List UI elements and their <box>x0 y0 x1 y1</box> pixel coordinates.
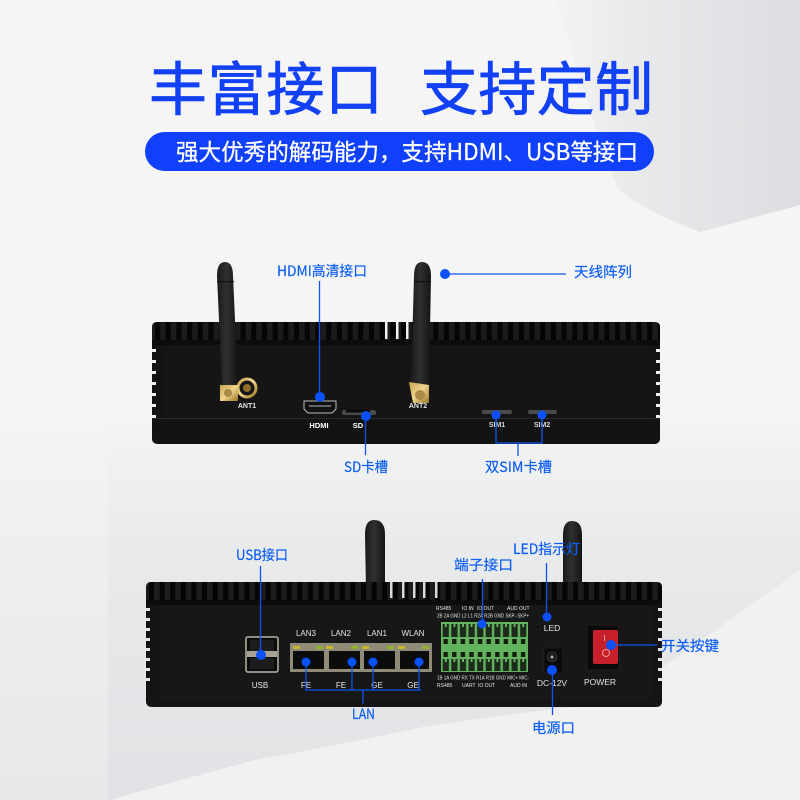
chassis bottom <box>146 582 662 707</box>
callout: SD <box>344 411 388 477</box>
terminal block: IO OUT <box>477 606 494 612</box>
port: USB: USB <box>252 681 268 690</box>
callout: USB: USB接口 <box>236 545 288 565</box>
port block: LAN: GE <box>407 681 419 690</box>
power switch <box>584 625 619 687</box>
port block: LAN <box>290 629 432 690</box>
port: SIM1: SIM1 <box>489 422 505 429</box>
terminal block: AUD IN <box>510 683 527 689</box>
port block: LAN: LAN3 <box>296 629 317 638</box>
port: USB <box>246 637 278 690</box>
callout: HDMI <box>277 261 367 402</box>
terminal block: RS485 <box>437 683 453 689</box>
antenna 2 <box>411 262 431 386</box>
port: SIM1 <box>482 410 512 429</box>
callout: switch: 开关按键 <box>661 636 719 656</box>
callout: SD: SD卡槽 <box>344 457 388 477</box>
device: top panel <box>152 262 660 444</box>
callout: terminal <box>454 555 513 628</box>
port block: LAN: LAN2 <box>331 629 352 638</box>
power switch: POWER <box>584 677 616 687</box>
indicator: LED: LED <box>544 623 560 633</box>
callout: antenna array: 天线阵列 <box>574 262 632 282</box>
title: 支持定制 <box>420 43 653 127</box>
port block: LAN: FE <box>336 681 346 690</box>
terminal block <box>436 606 530 689</box>
callout: power port: 电源口 <box>532 718 575 738</box>
callout: LED: LED指示灯 <box>513 539 580 559</box>
port: DC jack: DC-12V <box>537 678 567 688</box>
terminal block: IO IN <box>462 606 474 612</box>
title: 丰富接口 <box>149 43 383 127</box>
terminal block: 2B 2A GND L2 L1 R2A R2B GND SKP- SKP+ <box>437 614 529 620</box>
terminal block: UART <box>462 683 476 689</box>
port block: LAN: LAN1 <box>367 629 388 638</box>
connector: ANT2: ANT2 <box>409 403 427 410</box>
port: DC jack <box>537 648 567 688</box>
antenna 1 <box>217 262 238 386</box>
connector: ANT2 <box>409 382 429 410</box>
callout: antenna array <box>440 262 632 282</box>
port: HDMI: HDMI <box>309 421 329 430</box>
port: SIM2: SIM2 <box>534 422 550 429</box>
subtitle pill: 强大优秀的解码能力，支持HDMI、USB等接口 <box>176 133 638 167</box>
chassis top <box>152 322 660 444</box>
port: SIM2 <box>528 410 557 429</box>
port block: LAN: WLAN <box>401 629 425 638</box>
callout: power port <box>532 665 575 738</box>
connector: ANT1: ANT1 <box>238 403 256 410</box>
device: bottom panel <box>146 520 662 707</box>
callout: dual SIM <box>485 410 552 477</box>
terminal block: 1B 1A GND RX TX R1A R1B GND MIC+ MIC- <box>437 676 529 682</box>
port block: LAN: FE <box>301 681 311 690</box>
callout: dual SIM: 双SIM卡槽 <box>485 457 552 477</box>
callout: LAN <box>302 658 424 724</box>
callout: USB <box>236 545 288 660</box>
title <box>149 43 653 127</box>
port block: LAN: GE <box>371 681 383 690</box>
port: SD: SD <box>353 421 364 430</box>
port: HDMI <box>304 401 336 430</box>
antenna 3 <box>365 520 385 590</box>
callout: HDMI: HDMI高清接口 <box>277 261 367 281</box>
antenna 4 <box>563 521 582 590</box>
terminal block: RS485 <box>436 606 452 612</box>
port: SD <box>342 410 376 430</box>
terminal block: IO OUT <box>478 683 495 689</box>
callout: LED <box>513 539 580 622</box>
callout: LAN: LAN <box>352 704 375 724</box>
indicator: LED <box>536 623 560 633</box>
callout: terminal: 端子接口 <box>454 555 513 575</box>
terminal block: AUD OUT <box>507 606 530 612</box>
connector: ANT1 <box>220 379 256 410</box>
callout: switch <box>606 636 719 656</box>
